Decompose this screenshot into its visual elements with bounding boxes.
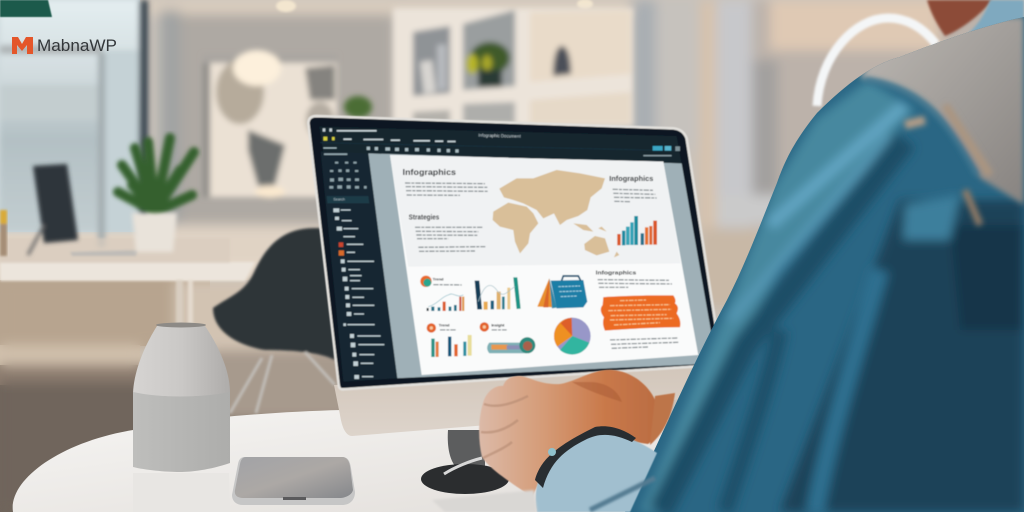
bar chart: top right xyxy=(617,216,657,245)
folder and pyramid graphic xyxy=(537,276,587,308)
document body text lines xyxy=(405,183,679,348)
donut icon: trend xyxy=(420,276,432,287)
capsule progress graphic xyxy=(487,337,535,353)
monitor stand and mouse xyxy=(421,430,509,494)
man's neck xyxy=(927,0,992,36)
document headings: Infographics xyxy=(403,168,457,177)
monitor silver chin xyxy=(334,366,692,436)
world map xyxy=(493,170,619,257)
document headings: Insight xyxy=(491,323,505,328)
app toolbar xyxy=(319,127,682,163)
office chair xyxy=(213,228,335,413)
logo wordmark: MabnaWP xyxy=(37,36,117,55)
ceiling spotlights xyxy=(276,0,593,12)
logo mark xyxy=(12,37,33,54)
round table xyxy=(13,410,700,512)
document headings: Strategies xyxy=(409,214,439,221)
dark sidebar: Search xyxy=(333,198,345,202)
ceramic vase xyxy=(133,322,230,472)
monitor screen xyxy=(308,116,721,389)
man's denim shirt shoulder xyxy=(625,17,1024,512)
document headings: Infographics xyxy=(609,176,653,183)
wall shelves with books and plants xyxy=(344,8,633,126)
small item at window edge xyxy=(0,210,7,256)
white document page xyxy=(390,155,698,375)
wall map poster xyxy=(203,50,337,198)
document headings: Trend xyxy=(433,276,444,281)
lower bar chart xyxy=(431,335,472,357)
potted plant xyxy=(118,138,194,252)
papers on table xyxy=(432,490,537,512)
shirt collar xyxy=(960,0,1024,40)
window with city view xyxy=(0,0,148,247)
shirt cuff xyxy=(536,433,657,512)
document headings xyxy=(403,168,653,328)
small desk monitor xyxy=(28,164,78,255)
brand logo xyxy=(12,36,117,55)
tall bars with line chart xyxy=(475,277,521,310)
cuff crease xyxy=(590,478,655,510)
ring wall light xyxy=(817,18,936,106)
man's hand on mouse xyxy=(479,370,675,497)
dark sidebar xyxy=(321,152,397,382)
app toolbar: Infographic Document xyxy=(478,133,522,139)
desk xyxy=(0,238,255,350)
wrist watch xyxy=(535,426,636,488)
pie chart xyxy=(554,318,591,355)
mini bar chart with line xyxy=(427,294,464,311)
bezel xyxy=(308,116,721,389)
document headings: Infographics xyxy=(596,271,636,277)
ceiling lamp xyxy=(0,0,52,17)
smartphone on table xyxy=(232,457,355,505)
orange circle icons xyxy=(427,322,489,333)
orange callout box xyxy=(601,295,680,331)
document headings: Trend xyxy=(439,323,450,328)
grey workspace xyxy=(368,153,717,378)
